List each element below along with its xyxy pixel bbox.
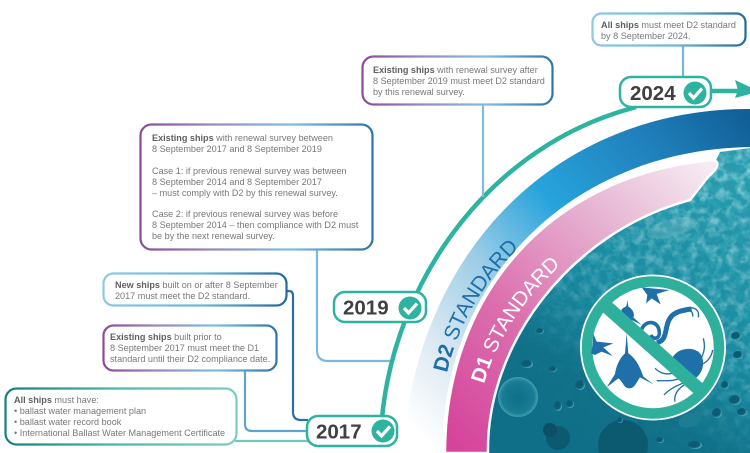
water background photo bbox=[480, 145, 750, 453]
label: D1 standard: D1 STANDARD bbox=[470, 258, 558, 383]
callout: all ships 2024: All ships must meet D2 standard bbox=[601, 20, 736, 30]
badge: 2019: 2019 bbox=[343, 296, 389, 320]
badge: 2017: 2017 bbox=[316, 420, 362, 444]
callout: existing ships prior to 2017: Existing ships built prior to bbox=[110, 332, 222, 342]
marine creatures bbox=[591, 287, 713, 402]
icon: prohibited invasive species sign bbox=[580, 274, 726, 420]
connector: renewal survey cases to arc bbox=[317, 250, 390, 361]
connector: 2019 renewal note to arc bbox=[482, 105, 484, 197]
callout: existing ships 2017 to 2019: be by the next renewal survey. bbox=[152, 231, 275, 241]
callout: existing ships 2017 to 2019: Existing ships with renewal survey between bbox=[152, 133, 333, 143]
callout: existing ships 2017 to 2019: Case 2: if previous renewal survey was before bbox=[152, 209, 338, 219]
callout: existing ships after 2019 bbox=[362, 56, 552, 104]
callout: existing ships prior to 2017: 8 September 2017 must meet the D1 bbox=[110, 343, 259, 353]
callout: all ships 2024 bbox=[592, 14, 746, 46]
callout: existing ships after 2019: Existing ships with renewal survey after bbox=[373, 65, 538, 75]
callout: existing ships after 2019: 8 September 2019 must meet D2 standard bbox=[373, 76, 545, 86]
callout: all ships must have: • ballast water record book bbox=[14, 417, 122, 427]
badge: 2019 bbox=[334, 292, 426, 322]
callout: existing ships prior to 2017 bbox=[104, 326, 276, 370]
callout: existing ships 2017 to 2019: – must comply with D2 by this renewal survey. bbox=[152, 188, 338, 198]
callout: existing ships after 2019: by this renewal survey. bbox=[373, 87, 465, 97]
callout: existing ships prior to 2017: standard until their D2 compliance date. bbox=[110, 354, 270, 364]
callout: existing ships 2017 to 2019: 8 September 2014 – then compliance with D2 must bbox=[152, 220, 359, 230]
label: D2 standard: D2 STANDARD bbox=[433, 240, 516, 372]
callout: existing ships 2017 to 2019: 8 September 2017 and 8 September 2019 bbox=[152, 144, 322, 154]
callout: new ships bbox=[104, 274, 286, 306]
callout: existing ships 2017 to 2019: Case 1: if previous renewal survey was between bbox=[152, 166, 347, 176]
connector: new ships to 2017 bbox=[287, 291, 308, 420]
callout: all ships must have: • ballast water management plan bbox=[14, 406, 146, 416]
badge: 2017 bbox=[307, 416, 397, 446]
callout: new ships: 2017 must meet the D2 standard. bbox=[115, 291, 250, 301]
callout: existing ships 2017 to 2019: 8 September 2014 and 8 September 2017 bbox=[152, 177, 322, 187]
connector: 2024 note to badge bbox=[682, 46, 684, 77]
callout: all ships must have: All ships must have: bbox=[14, 395, 99, 405]
D2 standard band bbox=[402, 109, 750, 453]
badge: 2024: 2024 bbox=[630, 82, 676, 105]
connector: existing ships to 2017 bbox=[245, 371, 308, 431]
connector: all ships to 2017 bbox=[235, 440, 308, 442]
timeline arc bbox=[382, 107, 636, 418]
D1 standard band bbox=[445, 160, 717, 453]
timeline arrow bbox=[712, 80, 750, 98]
callout: all ships 2024: by 8 September 2024. bbox=[601, 31, 690, 41]
callout: all ships must have bbox=[6, 388, 236, 444]
callout: existing ships 2017 to 2019 bbox=[140, 124, 372, 250]
badge: 2024 bbox=[620, 77, 711, 107]
callout: all ships must have: • International Ballast Water Management Certificate bbox=[14, 428, 225, 438]
callout: new ships: New ships built on or after 8 September bbox=[115, 280, 278, 290]
